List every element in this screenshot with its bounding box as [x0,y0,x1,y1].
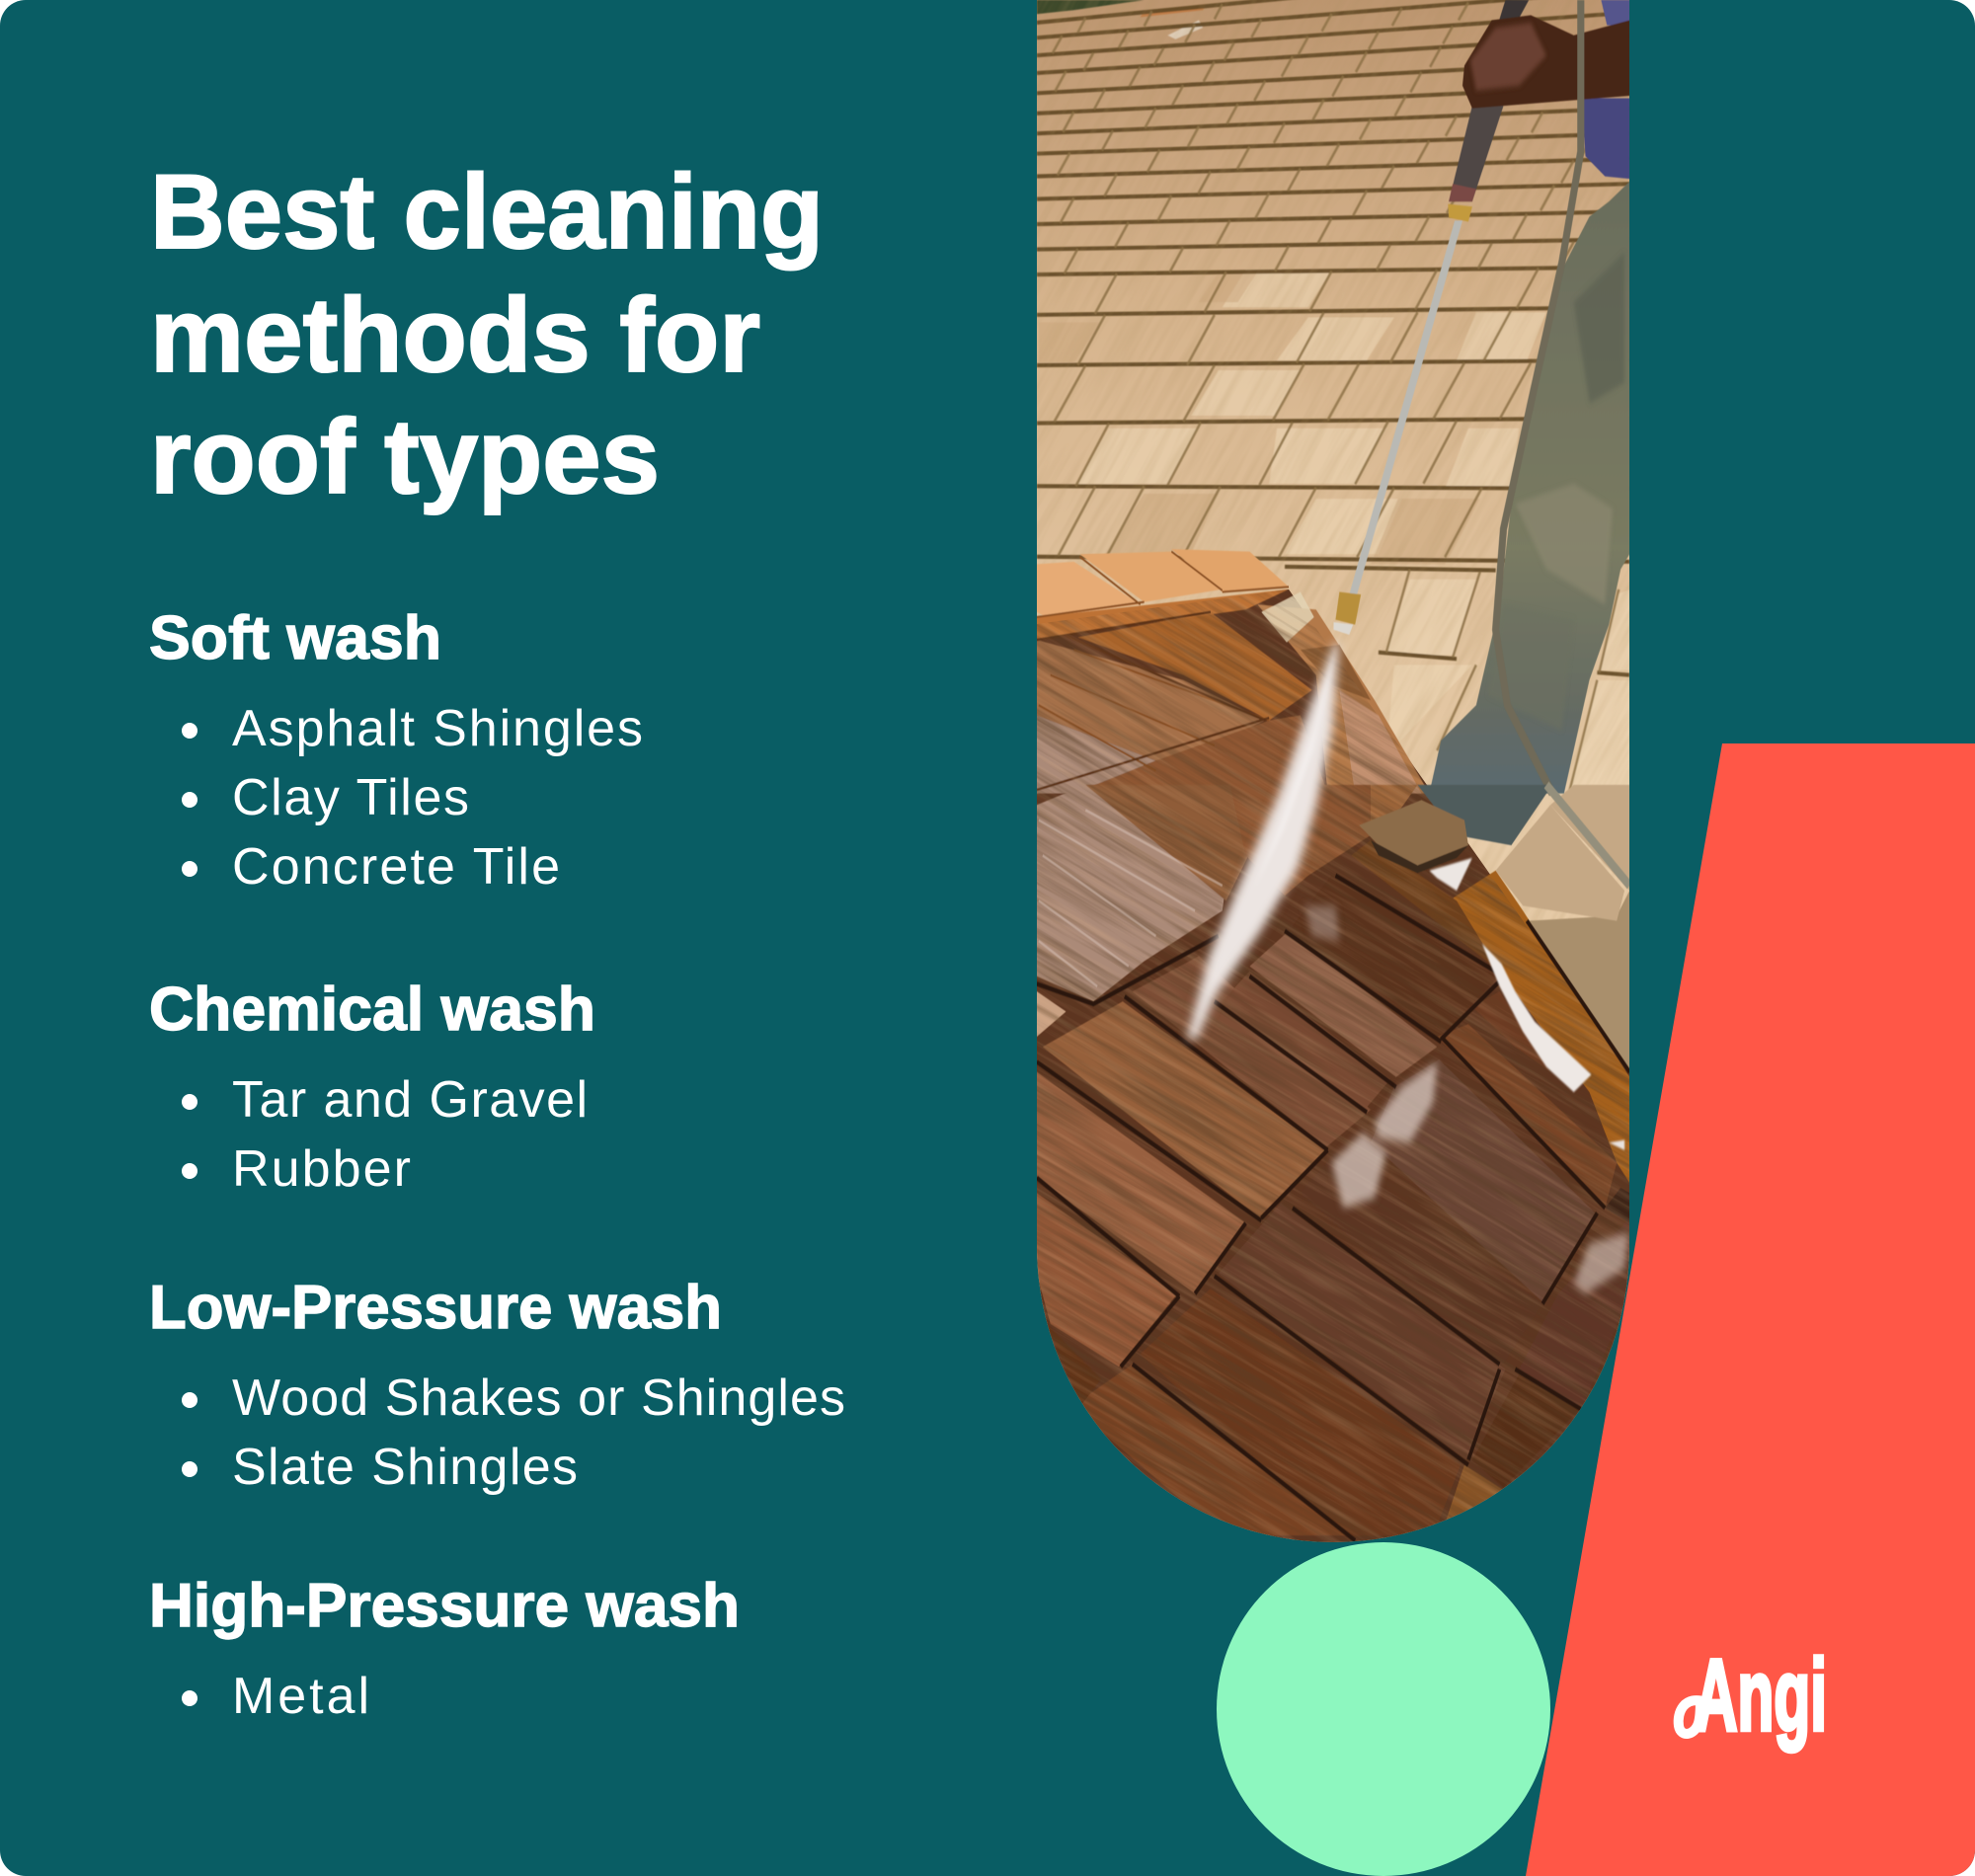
white water splashes [1304,905,1628,1293]
heading: high-pressure wash: High-Pressure wash [149,1572,740,1640]
upper roof wood grain [1037,0,1629,920]
photo: pressure washing a wood shingle roof [1037,0,1629,1542]
list: chemical wash roof types: Rubber [232,1140,411,1198]
list: high-pressure wash roof types: Metal [232,1668,369,1725]
list: low-pressure wash roof types [182,1369,845,1496]
logo: Angi [1679,1638,1827,1752]
section: chemical wash [149,976,595,1198]
orange valley and tan shingles [1371,784,1417,821]
list: chemical wash roof types: Tar and Gravel [232,1071,588,1129]
section: soft wash [149,604,643,896]
list: soft wash roof types: Clay Tiles [232,769,469,826]
list: low-pressure wash roof types: Slate Shingles [232,1439,578,1496]
lower wet brown roof [1037,589,1629,1542]
heading: chemical wash: Chemical wash [149,976,595,1044]
title: Best cleaning [150,152,824,271]
title: methods for [150,275,760,394]
shingle gaps [1053,3,1619,790]
list: low-pressure wash roof types: Wood Shakes or Shingles [232,1369,845,1427]
dark gaps [1037,876,1629,1540]
logo: Angi: Angi [1695,1638,1827,1752]
list: soft wash roof types: Concrete Tile [232,838,560,896]
upper left wet shingles [1037,785,1230,1001]
title: roof types [150,397,660,515]
ridge cap shingles [1037,562,1141,617]
worker: hose, legs, arm and wand [1333,0,1629,794]
heading: soft wash: Soft wash [149,604,441,672]
section: high-pressure wash [149,1572,740,1725]
wood shakes [1043,1001,1326,1218]
title [150,152,824,515]
list: chemical wash roof types [182,1071,588,1198]
wet wood grain [1037,589,1629,1542]
list: soft wash roof types [182,709,642,885]
heading: low-pressure wash: Low-Pressure wash [149,1274,722,1342]
list: soft wash roof types: Asphalt Shingles [232,700,643,757]
circle: mint accent [1217,1542,1550,1876]
water spray [1187,642,1339,1039]
section: low-pressure wash [149,1274,845,1496]
panel: coral angled block [1526,743,1975,1876]
shingle row lines [1037,0,1629,675]
